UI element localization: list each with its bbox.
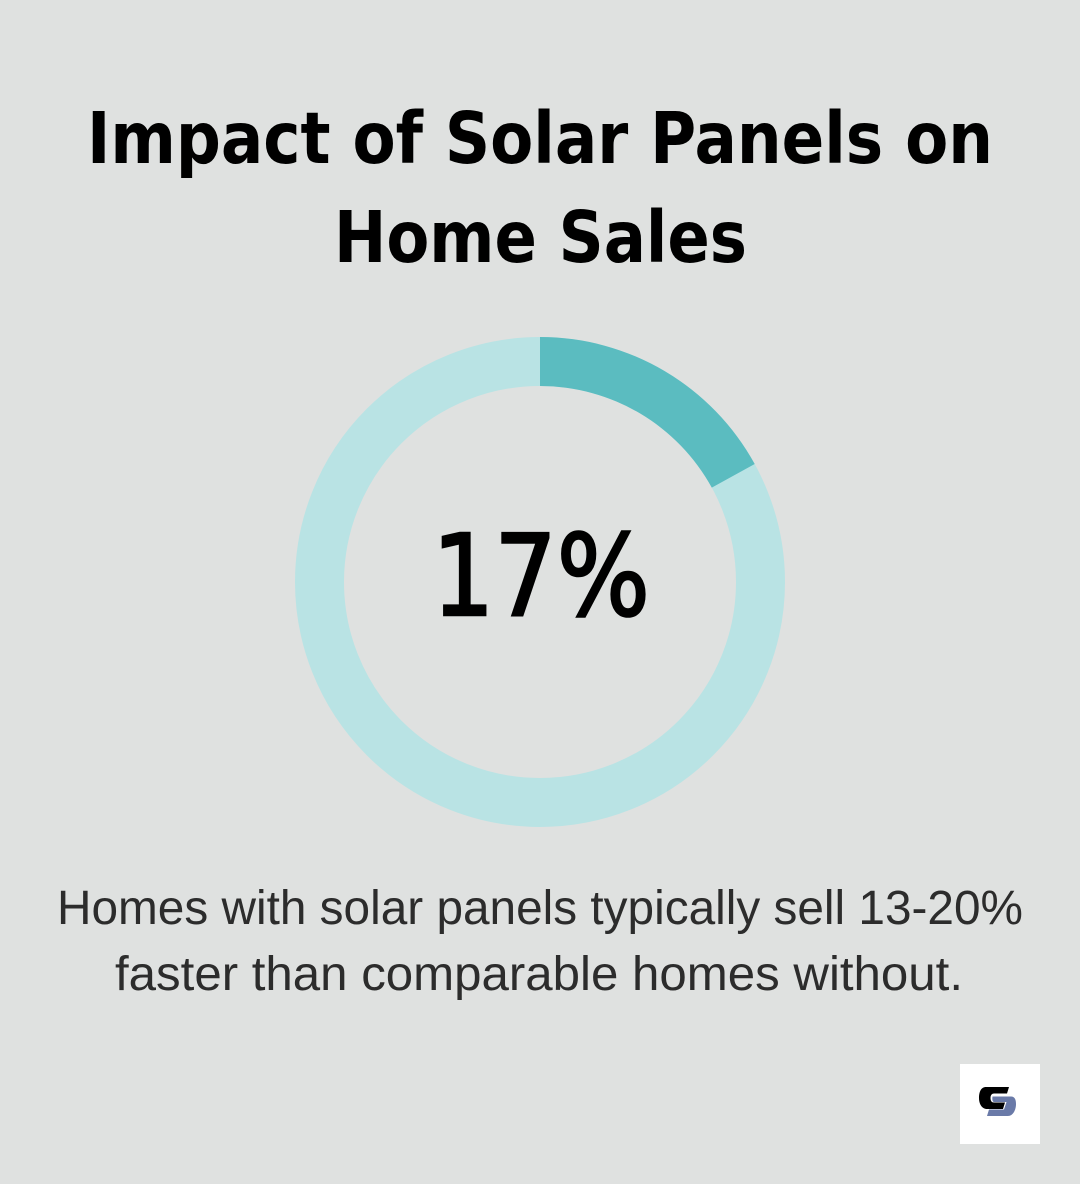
title xyxy=(87,97,993,279)
description text xyxy=(57,882,1023,1001)
description text: faster than comparable homes without. xyxy=(115,948,963,1001)
description text: Homes with solar panels typically sell 13-20% xyxy=(57,882,1023,935)
donut value: 17% xyxy=(432,512,650,642)
donut chart: 17% xyxy=(320,337,760,802)
logo badge xyxy=(960,1064,1040,1144)
title: Impact of Solar Panels on xyxy=(87,97,993,180)
title: Home Sales xyxy=(334,196,747,279)
